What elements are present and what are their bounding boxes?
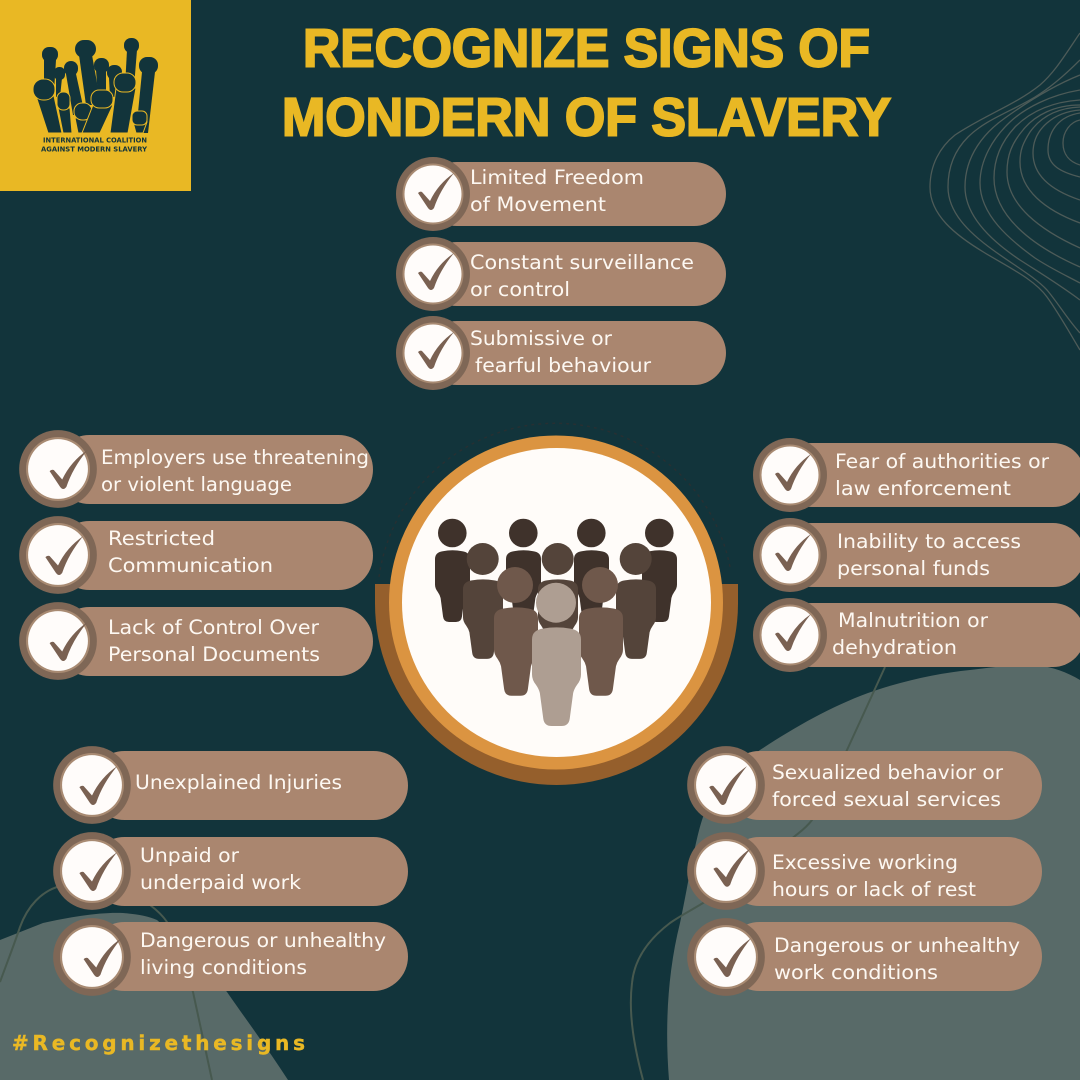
sign: inability to access funds bbox=[753, 518, 1080, 592]
sign group: right bbox=[753, 438, 1080, 672]
sign: restricted communication bbox=[19, 516, 373, 594]
sign: unpaid or underpaid work: underpaid work bbox=[140, 871, 302, 894]
logo panel bbox=[0, 0, 191, 191]
sign group: left bbox=[19, 430, 373, 680]
sign group: top bbox=[396, 157, 726, 390]
sign: sexualized behavior: forced sexual services bbox=[772, 788, 1001, 811]
sign: inability to access funds: personal funds bbox=[837, 557, 990, 580]
sign: malnutrition or dehydration bbox=[753, 598, 1080, 672]
decorative blob: bottom right bbox=[667, 665, 1080, 1080]
sign: threatening language bbox=[19, 430, 373, 508]
sign: excessive working hours: Excessive working bbox=[772, 851, 958, 874]
decorative blob: bottom left bbox=[0, 913, 288, 1080]
sign: constant surveillance: or control bbox=[470, 278, 570, 301]
sign: sexualized behavior bbox=[687, 746, 1042, 824]
brown base bbox=[375, 584, 738, 785]
sign: unexplained injuries: Unexplained Injuries bbox=[135, 771, 342, 794]
sign: excessive working hours bbox=[687, 832, 1042, 910]
sign: dangerous living conditions: living conditions bbox=[140, 956, 307, 979]
sign: lack of control over documents: Lack of Control Over bbox=[108, 616, 320, 639]
title: RECOGNIZE SIGNS OF bbox=[303, 18, 870, 78]
sign: limited freedom of movement: of Movement bbox=[470, 193, 606, 216]
sign: unpaid or underpaid work bbox=[53, 832, 408, 910]
sign: dangerous work conditions: Dangerous or unhealthy bbox=[774, 934, 1020, 957]
sign: submissive or fearful behaviour: Submissive or bbox=[470, 327, 613, 350]
sign: sexualized behavior: Sexualized behavior or bbox=[772, 761, 1004, 784]
sign: restricted communication: Restricted bbox=[108, 527, 215, 550]
sign: limited freedom of movement: Limited Freedom bbox=[470, 166, 644, 189]
sign: restricted communication: Communication bbox=[108, 554, 273, 577]
sign: dangerous work conditions: work conditions bbox=[774, 961, 938, 984]
sign: inability to access funds: Inability to access bbox=[837, 530, 1021, 553]
sign: dangerous living conditions bbox=[53, 918, 408, 996]
decorative curve: right bbox=[631, 667, 885, 1080]
sign: threatening language: Employers use threatening bbox=[101, 446, 369, 469]
sign: fear of authorities: law enforcement bbox=[835, 477, 1011, 500]
central emblem bbox=[375, 423, 738, 785]
sign: lack of control over documents: Personal Documents bbox=[108, 643, 320, 666]
title bbox=[282, 18, 891, 148]
white disc bbox=[402, 448, 711, 757]
sign: fear of authorities bbox=[753, 438, 1080, 512]
title: MONDERN OF SLAVERY bbox=[282, 88, 891, 148]
logo text bbox=[41, 136, 148, 154]
sign: unexplained injuries bbox=[53, 746, 408, 824]
dotted arc bbox=[379, 423, 730, 577]
logo text: INTERNATIONAL COALITION bbox=[43, 136, 147, 144]
sign: limited freedom of movement bbox=[396, 157, 726, 231]
logo text: AGAINST MODERN SLAVERY bbox=[41, 146, 148, 154]
sign: malnutrition or dehydration: Malnutrition or bbox=[838, 609, 989, 632]
sign group: bottom right bbox=[687, 746, 1042, 996]
sign: submissive or fearful behaviour: fearful behaviour bbox=[475, 354, 652, 377]
decorative contour lines: top right bbox=[930, 33, 1080, 350]
decorative curve: left bbox=[0, 883, 212, 1080]
icon: raised fists bbox=[33, 38, 158, 133]
sign: lack of control over documents bbox=[19, 602, 373, 680]
sign: threatening language: or violent language bbox=[101, 473, 292, 496]
sign: dangerous living conditions: Dangerous or unhealthy bbox=[140, 929, 386, 952]
sign: constant surveillance: Constant surveillance bbox=[470, 251, 694, 274]
hashtag: #Recognizethesigns bbox=[12, 1031, 305, 1055]
sign: dangerous work conditions bbox=[687, 918, 1042, 996]
sign: unpaid or underpaid work: Unpaid or bbox=[140, 844, 240, 867]
sign: excessive working hours: hours or lack of rest bbox=[772, 878, 976, 901]
sign group: bottom left bbox=[53, 746, 408, 996]
icon: crowd of people bbox=[435, 519, 677, 726]
orange ring bbox=[389, 436, 723, 770]
sign: fear of authorities: Fear of authorities or bbox=[835, 450, 1050, 473]
sign: constant surveillance bbox=[396, 237, 726, 311]
sign: submissive or fearful behaviour bbox=[396, 316, 726, 390]
sign: malnutrition or dehydration: dehydration bbox=[832, 636, 957, 659]
